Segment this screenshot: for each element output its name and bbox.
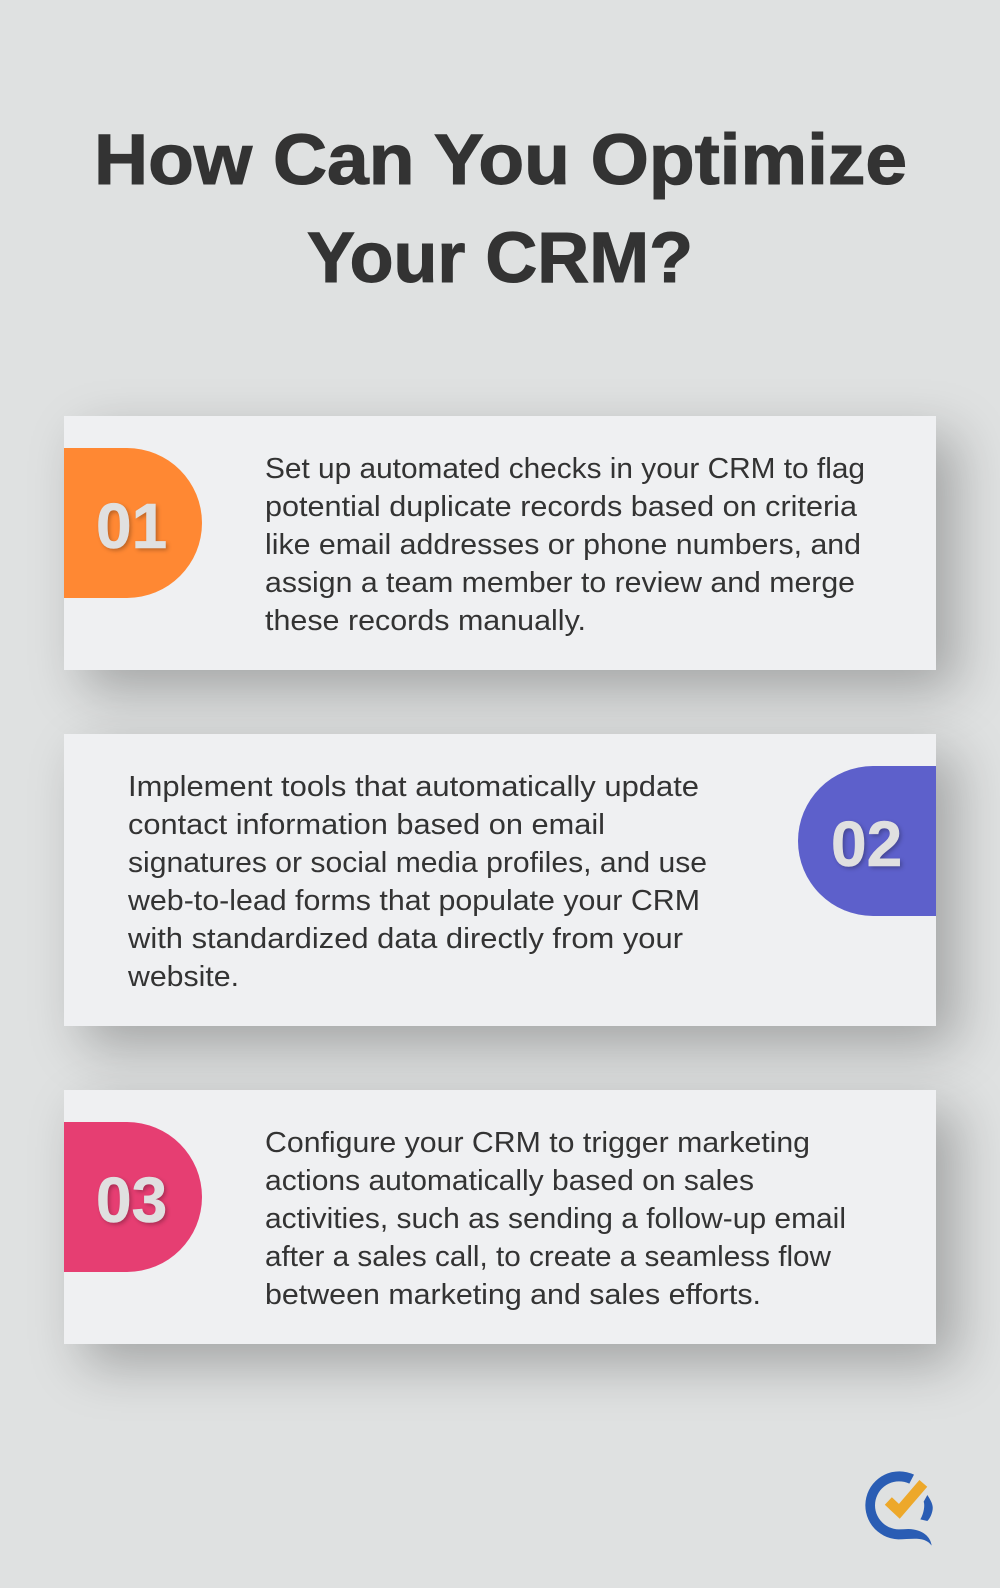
text block: step 03: activities, such as sending a follow-up email xyxy=(265,1203,846,1235)
badge: 01 xyxy=(64,448,202,598)
text block: step 03: between marketing and sales efforts. xyxy=(265,1279,761,1311)
text block: step 01: these records manually. xyxy=(265,605,586,637)
text block: step 01: assign a team member to review and merge xyxy=(265,567,855,599)
panel: step 03 card xyxy=(64,1090,936,1344)
text block: step 01: potential duplicate records based on criteria xyxy=(265,491,858,523)
title xyxy=(94,121,907,298)
badge: 02: 02 xyxy=(831,808,902,880)
text block: step 02: web-to-lead forms that populate your CRM xyxy=(127,885,700,917)
text block: step 01: Set up automated checks in your CRM to flag xyxy=(265,453,865,485)
text block: step 02: with standardized data directly from your xyxy=(127,923,683,955)
badge: 03 xyxy=(64,1122,202,1272)
text block: step 01: like email addresses or phone numbers, and xyxy=(265,529,861,561)
text block: step 02: website. xyxy=(127,961,239,993)
text block: step 02: Implement tools that automatically update xyxy=(128,771,699,803)
badge: 03: 03 xyxy=(96,1164,167,1236)
badge: 01: 01 xyxy=(96,490,167,562)
badge: 02 xyxy=(798,766,936,916)
panel: step 02 card xyxy=(64,734,936,1026)
icon: logo check in speech ring xyxy=(865,1471,933,1546)
text block: step 03 xyxy=(265,1127,846,1311)
title: Your CRM? xyxy=(307,219,693,298)
text block: step 02: signatures or social media profiles, and use xyxy=(128,847,707,879)
title: How Can You Optimize xyxy=(94,121,907,200)
text block: step 03: actions automatically based on sales xyxy=(265,1165,754,1197)
panel: step 01 card xyxy=(64,416,936,670)
text block: step 01 xyxy=(265,453,865,637)
text block: step 02: contact information based on email xyxy=(128,809,605,841)
text block: step 02 xyxy=(127,771,707,993)
text block: step 03: after a sales call, to create a seamless flow xyxy=(265,1241,832,1273)
text block: step 03: Configure your CRM to trigger marketing xyxy=(265,1127,810,1159)
